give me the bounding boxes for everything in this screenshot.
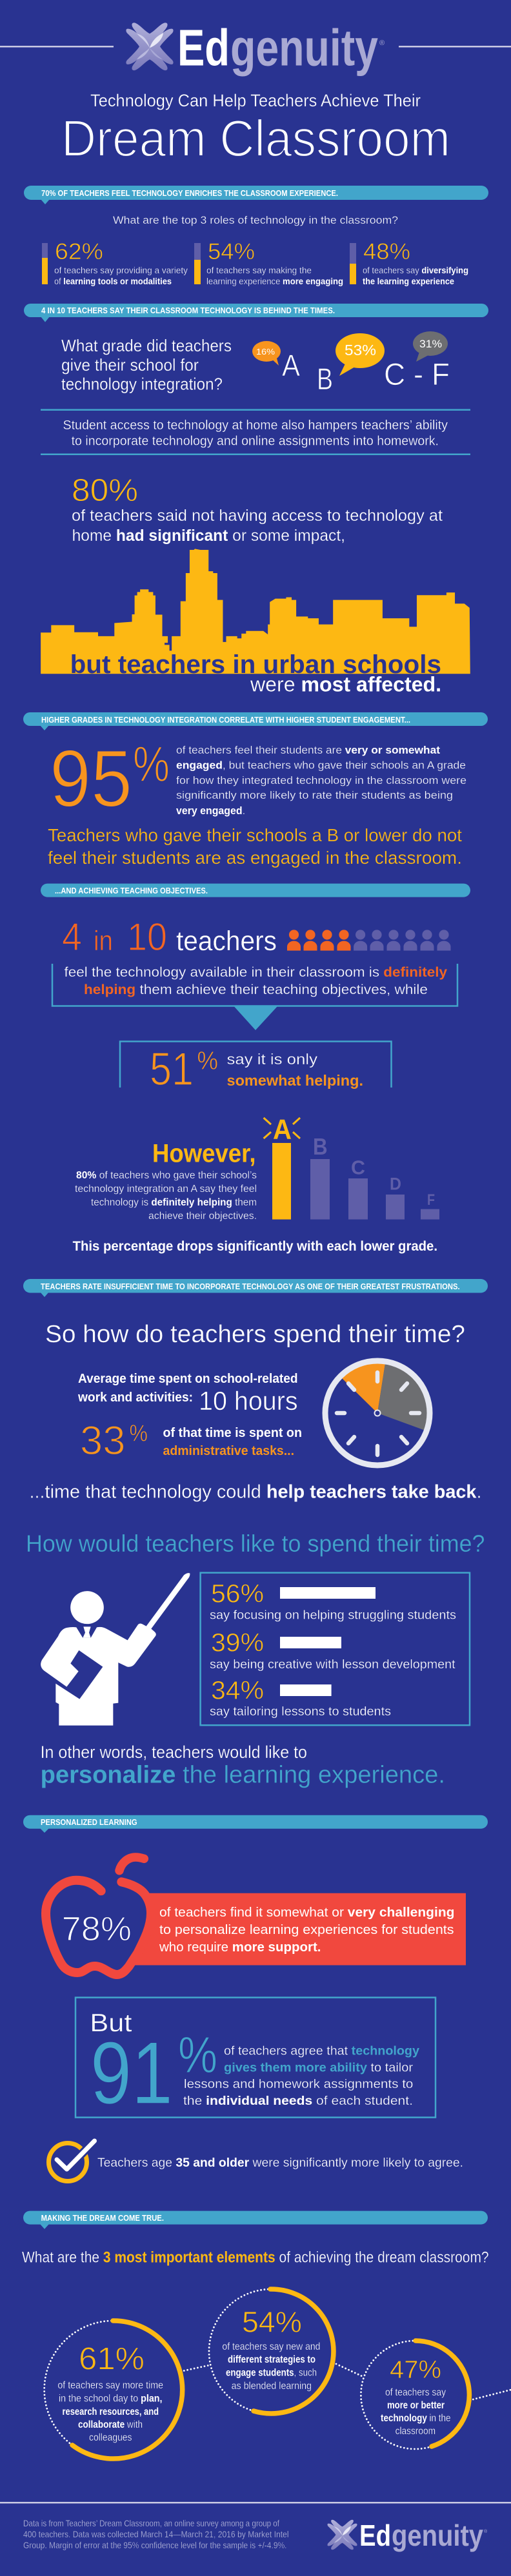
footnote text bbox=[23, 2518, 289, 2550]
text: 10 hours bbox=[77, 1372, 298, 1416]
Edgenuity logo: ® bbox=[379, 39, 385, 47]
heading: 4 in 10 teachers: 4 bbox=[62, 915, 82, 959]
grade C-F bubble 31% bbox=[384, 331, 450, 392]
panel: but 91%: lessons and homework assignments to bbox=[184, 2078, 413, 2091]
text: student access: to incorporate technology and online assignments into homework. bbox=[72, 434, 439, 449]
text: engagement detail bbox=[176, 744, 466, 817]
icon: teacher with pointer bbox=[41, 1573, 190, 1726]
panel: 51% somewhat helping: 51 bbox=[150, 1044, 194, 1095]
text: student access: Student access to technology at home also hampers teachers’ ability bbox=[63, 418, 448, 433]
stat: 48%: the learning experience bbox=[363, 277, 454, 286]
circle: 54%: different strategies to bbox=[228, 2354, 316, 2365]
stat: 80%: home had significant or some impact, bbox=[72, 527, 345, 545]
heading: 4 in 10 teachers: 10 bbox=[127, 915, 167, 959]
text: 10 hours: 10 hours bbox=[199, 1386, 298, 1416]
circle: 61%: in the school day to plan, bbox=[59, 2394, 163, 2405]
footer Edgenuity logo bbox=[327, 2519, 488, 2552]
text: personalize the learning experience: personalize the learning experience. bbox=[41, 1762, 445, 1789]
panel: but 91%: of teachers agree that technology bbox=[224, 2044, 419, 2058]
banner: personalized learning bbox=[23, 1815, 488, 1833]
stat: 33%: % bbox=[129, 1420, 148, 1447]
callout: B or lower: feel their students are as engaged in the classroom. bbox=[48, 848, 462, 868]
text: however: However, bbox=[152, 1140, 256, 1168]
stat: 62%: 62% bbox=[55, 239, 103, 264]
header rule left bbox=[0, 46, 114, 48]
question: what grade: technology integration? bbox=[61, 374, 223, 393]
pictogram: 4 of 10 teachers bbox=[287, 930, 450, 951]
banner: 70% of teachers: 70% OF TEACHERS FEEL TECHNOLOGY ENRICHES THE CLASSROOM EXPERIENCE. bbox=[41, 189, 338, 198]
bar chart: grades: F bbox=[427, 1191, 435, 1209]
heading: so how do teachers spend: So how do teachers spend their time? bbox=[45, 1321, 465, 1348]
skyline illustration bbox=[41, 549, 470, 679]
circle: 47%: classroom bbox=[396, 2426, 436, 2437]
stat: 54%: learning experience more engaging bbox=[206, 277, 343, 286]
bar: 34% bbox=[210, 1676, 391, 1719]
circle: 47%: more or better bbox=[387, 2400, 445, 2411]
grade A bubble 16%: A bbox=[282, 348, 301, 382]
bar: 39% bbox=[210, 1628, 456, 1672]
text: 10 hours: work and activities: bbox=[77, 1390, 193, 1405]
icon: apple bbox=[46, 1857, 151, 1975]
banner: achieving teaching objectives: ...AND ACHIEVING TEACHING OBJECTIVES. bbox=[55, 886, 208, 895]
grade B bubble 53%: B bbox=[317, 362, 333, 396]
connector dots between circles bbox=[181, 2364, 511, 2399]
text: however: technology is definitely helping them bbox=[91, 1197, 257, 1208]
callout: B or lower bbox=[48, 825, 462, 868]
Edgenuity logo: Ed bbox=[177, 19, 230, 76]
header rule right bbox=[399, 46, 511, 48]
grade C-F bubble 31%: 31% bbox=[419, 338, 442, 350]
question: what grade bbox=[61, 336, 232, 393]
circle: 61%: of teachers say more time bbox=[57, 2380, 163, 2391]
footer Edgenuity logo: Ed bbox=[359, 2519, 391, 2552]
stat: 62% bbox=[42, 239, 188, 286]
footnote text: Group. Margin of error at the 95% confidence level for the sample is +/-4.9%. bbox=[23, 2540, 286, 2550]
panel: 78% apple callout bbox=[46, 1857, 466, 1975]
circle: 61%: collaborate with bbox=[78, 2419, 143, 2430]
heading: 4 in 10 teachers bbox=[62, 915, 277, 959]
circle: 47% bbox=[361, 2341, 469, 2449]
stat: 62%: of learning tools or modalities bbox=[54, 277, 172, 286]
circle: 54%: engage students, such bbox=[226, 2367, 317, 2378]
bar chart: grades: D bbox=[390, 1175, 401, 1194]
question: top 3 roles: What are the top 3 roles of technology in the classroom? bbox=[113, 214, 398, 226]
panel: 51% somewhat helping: somewhat helping. bbox=[227, 1072, 363, 1089]
text: however bbox=[75, 1140, 257, 1222]
heading: how would teachers like: How would teachers like to spend their time? bbox=[26, 1530, 485, 1557]
panel: 78% apple callout: to personalize learning experiences for students bbox=[159, 1923, 454, 1937]
panel: but 91%: But bbox=[90, 2009, 132, 2037]
text: student access bbox=[63, 418, 448, 449]
bracket panel: definitely helping: feel the technology available in their classroom is definitely bbox=[65, 965, 447, 980]
banner: insufficient time: TEACHERS RATE INSUFFICIENT TIME TO INCORPORATE TECHNOLOGY AS ONE OF THEIR GREATEST FRUSTRATIONS. bbox=[41, 1282, 460, 1291]
stat: 95%: 95 bbox=[50, 734, 132, 824]
panel: 78% apple callout: of teachers find it somewhat or very challenging bbox=[159, 1906, 454, 1920]
panel: but 91%: 91 bbox=[90, 2024, 173, 2123]
stat: 54% bbox=[194, 239, 343, 286]
banner: achieving teaching objectives bbox=[41, 884, 470, 897]
circle: 54%: as blended learning bbox=[232, 2381, 312, 2392]
callout: B or lower: Teachers who gave their schools a B or lower do not bbox=[48, 825, 462, 845]
title: Technology Can Help Teachers Achieve Their bbox=[90, 91, 421, 110]
panel: 51% somewhat helping: say it is only bbox=[227, 1051, 318, 1068]
panel: how teachers would spend time bbox=[201, 1573, 470, 1725]
text: personalize the learning experience: In other words, teachers would like to bbox=[41, 1742, 307, 1762]
bracket panel: definitely helping bbox=[52, 964, 457, 1030]
text: time technology could take back: ...time that technology could help teachers take back. bbox=[30, 1482, 481, 1503]
circle: 61%: colleagues bbox=[89, 2432, 132, 2443]
Edgenuity logo bbox=[126, 19, 385, 76]
banner: higher grades bbox=[23, 712, 488, 730]
stat: 80% bbox=[72, 473, 443, 545]
circle: 54% bbox=[209, 2289, 334, 2414]
stat: 54%: 54% bbox=[208, 239, 255, 264]
banner: 4 in 10 behind the times bbox=[24, 304, 488, 322]
stat: 95%: % bbox=[133, 736, 170, 792]
circle: 61%: 61% bbox=[79, 2342, 145, 2377]
banner: insufficient time bbox=[23, 1279, 488, 1297]
bar: 34%: say tailoring lessons to students bbox=[210, 1705, 391, 1719]
heading: 4 in 10 teachers: in bbox=[94, 925, 113, 957]
question: what grade: give their school for bbox=[61, 355, 199, 375]
circle: 47%: 47% bbox=[390, 2356, 441, 2384]
panel: 78% apple callout: who require more support. bbox=[159, 1940, 321, 1955]
divider rule bottom bbox=[41, 454, 470, 455]
circle: 61% bbox=[45, 2321, 183, 2459]
bar: 39%: 39% bbox=[211, 1628, 264, 1657]
icon: check mark bbox=[49, 2141, 94, 2181]
banner: higher grades: HIGHER GRADES IN TECHNOLOGY INTEGRATION CORRELATE WITH HIGHER STUDENT ENGAGEMENT... bbox=[41, 716, 410, 725]
text: personalize the learning experience bbox=[41, 1742, 445, 1789]
heading: 4 in 10 teachers: teachers bbox=[176, 926, 277, 957]
divider rule top bbox=[41, 409, 470, 411]
panel: 51% somewhat helping: % bbox=[197, 1047, 218, 1075]
footer rule bbox=[0, 2502, 511, 2504]
bar chart: grades: B bbox=[313, 1133, 328, 1160]
footnote text: Data is from Teachers’ Dream Classroom, an online survey among a group of bbox=[23, 2518, 279, 2528]
text: however: technology integration an A say they feel bbox=[75, 1184, 257, 1195]
stat: 54%: of teachers say making the bbox=[206, 266, 312, 275]
bar: 56%: 56% bbox=[211, 1580, 264, 1608]
bar: 56%: say focusing on helping struggling students bbox=[210, 1609, 456, 1623]
grade A bubble 16%: 16% bbox=[256, 347, 275, 356]
grade B bubble 53% bbox=[317, 333, 385, 396]
footer Edgenuity logo: genuity bbox=[392, 2519, 483, 2552]
text: however: achieve their objectives. bbox=[148, 1211, 257, 1222]
bar chart: grades: C bbox=[351, 1156, 365, 1179]
stat: 33%: 33 bbox=[80, 1418, 125, 1463]
text: teachers age 35: Teachers age 35 and older were significantly more likely to agree. bbox=[97, 2156, 463, 2170]
text: engagement detail: engaged, but teachers who gave their schools an A grade bbox=[176, 759, 466, 772]
stat: 33%: administrative tasks... bbox=[163, 1444, 294, 1458]
circle: 61%: research resources, and bbox=[62, 2406, 159, 2417]
stat: 80%: 80% bbox=[72, 473, 138, 508]
text: percentage drops: This percentage drops significantly with each lower grade. bbox=[73, 1239, 437, 1254]
bar chart: grades: A bbox=[273, 1114, 292, 1145]
grade A bubble 16% bbox=[252, 341, 301, 382]
bar: 39%: say being creative with lesson development bbox=[210, 1658, 456, 1672]
panel: but 91%: % bbox=[178, 2026, 217, 2083]
bar: 34%: 34% bbox=[211, 1676, 264, 1704]
stat: 48% bbox=[350, 239, 468, 286]
circle: 54%: 54% bbox=[242, 2305, 302, 2338]
text: engagement detail: for how they integrated technology in the classroom were bbox=[176, 774, 466, 786]
text: 10 hours: Average time spent on school-related bbox=[78, 1372, 298, 1386]
text: most affected: were most affected. bbox=[250, 673, 441, 696]
banner: making the dream come true: MAKING THE DREAM COME TRUE. bbox=[41, 2214, 164, 2223]
banner: making the dream come true bbox=[23, 2211, 488, 2229]
circle: 54%: of teachers say new and bbox=[222, 2341, 320, 2352]
banner: 4 in 10 behind the times: 4 IN 10 TEACHERS SAY THEIR CLASSROOM TECHNOLOGY IS BEHIND THE TIMES. bbox=[41, 306, 335, 315]
icon: clock bbox=[325, 1361, 430, 1465]
text: however: 80% of teachers who gave their school’s bbox=[76, 1170, 257, 1181]
banner: 70% of teachers bbox=[24, 186, 488, 204]
panel: but 91%: gives them more ability to tailor bbox=[224, 2061, 414, 2074]
bracket panel: definitely helping: helping them achieve their teaching objectives, while bbox=[84, 982, 428, 997]
panel: but 91%: the individual needs of each student. bbox=[183, 2094, 413, 2108]
stat: 33% bbox=[80, 1418, 302, 1463]
bar: 56% bbox=[210, 1580, 456, 1623]
stat: 48%: of teachers say diversifying bbox=[363, 266, 468, 275]
footnote text: 400 teachers. Data was collected March 14—March 21, 2016 by Market Intel bbox=[23, 2529, 289, 2539]
panel: 51% somewhat helping bbox=[120, 1042, 391, 1095]
text: engagement detail: significantly more likely to rate their students as being bbox=[176, 789, 453, 801]
bar chart: grades bbox=[264, 1114, 439, 1220]
circle: 47%: of teachers say bbox=[385, 2387, 446, 2398]
panel: 78% apple callout: 78% bbox=[62, 1910, 132, 1948]
stat: 33%: of that time is spent on bbox=[163, 1426, 302, 1440]
grade C-F bubble 31%: C - F bbox=[384, 358, 450, 392]
Edgenuity logo: genuity bbox=[230, 19, 378, 76]
grade B bubble 53%: 53% bbox=[345, 342, 376, 358]
footer Edgenuity logo: ® bbox=[484, 2529, 488, 2534]
question: what grade: What grade did teachers bbox=[61, 336, 232, 355]
panel: but 91% bbox=[75, 1998, 436, 2123]
circle: 47%: technology in the bbox=[381, 2413, 450, 2424]
text: engagement detail: very engaged. bbox=[176, 805, 245, 817]
stat: 80%: of teachers said not having access to technology at bbox=[72, 507, 443, 525]
skyline illustration: but teachers in urban schools bbox=[70, 650, 441, 679]
stat: 48%: 48% bbox=[363, 239, 410, 264]
title: Dream Classroom bbox=[61, 110, 450, 167]
stat: 62%: of teachers say providing a variety bbox=[54, 266, 188, 275]
text: engagement detail: of teachers feel their students are very or somewhat bbox=[176, 744, 440, 756]
question: 3 most important elements: What are the 3 most important elements of achieving the dream classroom? bbox=[22, 2249, 489, 2267]
banner: personalized learning: PERSONALIZED LEARNING bbox=[41, 1818, 137, 1827]
